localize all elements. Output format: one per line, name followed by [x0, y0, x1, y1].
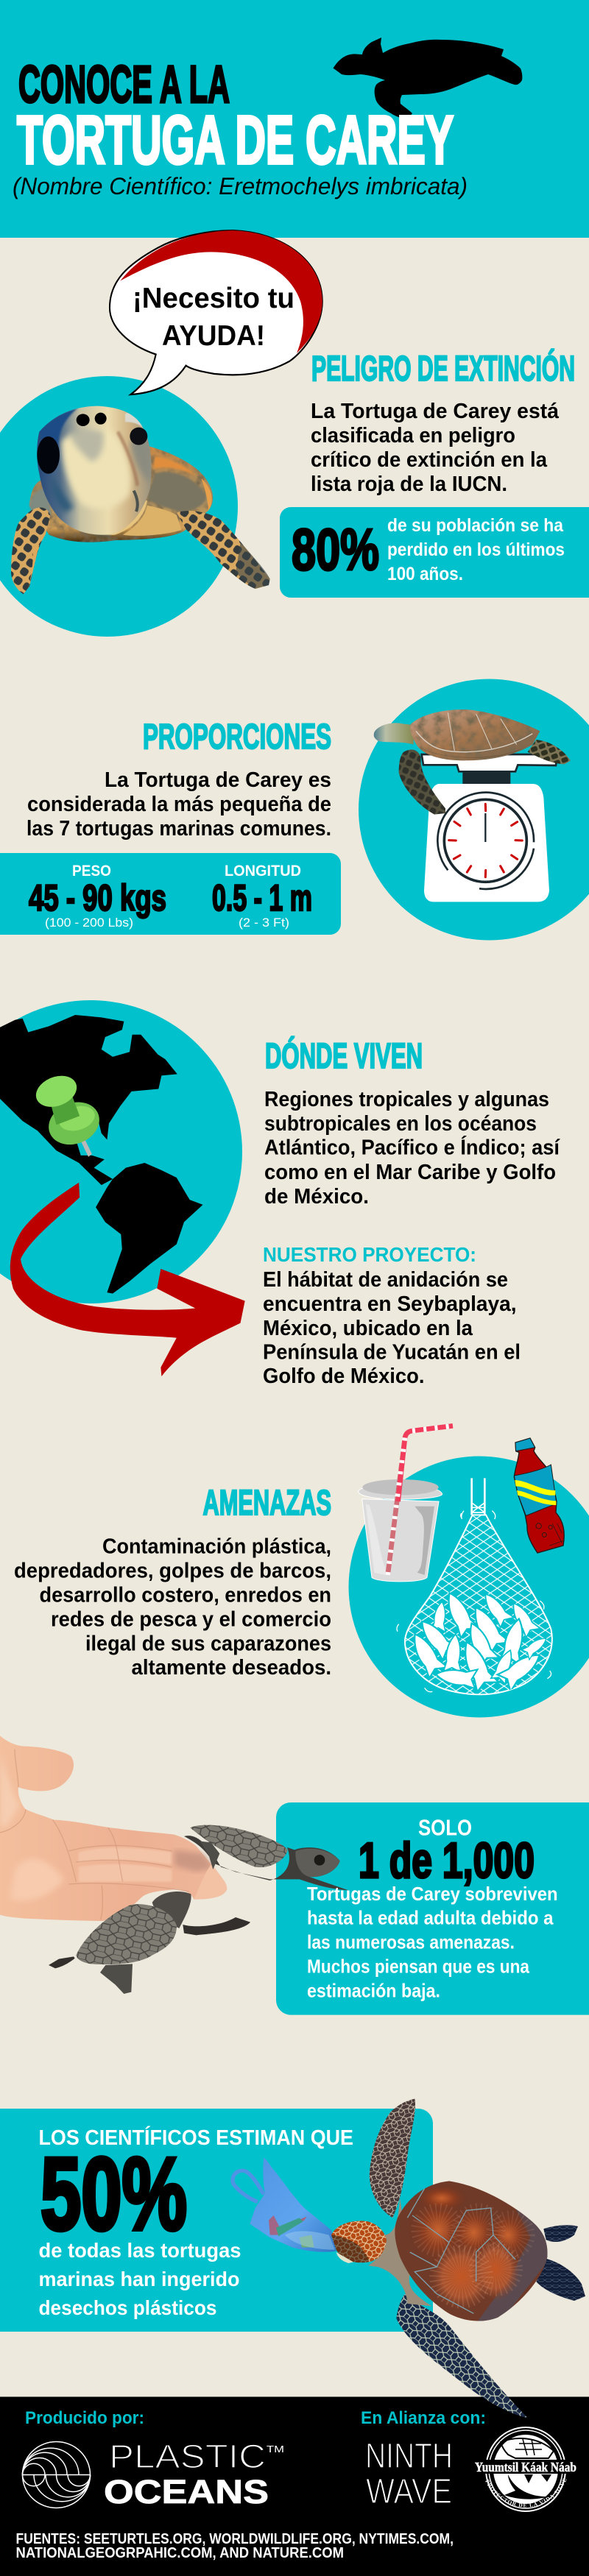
text block: amenazas: desarrollo costero, enredos en	[40, 1584, 331, 1607]
text block: proporciones: las 7 tortugas marinas comunes.	[27, 817, 331, 841]
text block: regiones: de México.	[264, 1185, 369, 1209]
icon: plastic cup with straw	[359, 1426, 453, 1582]
panel: proporciones	[0, 679, 589, 941]
header panel	[0, 0, 589, 238]
logo: ninth wave: WAVE	[366, 2472, 452, 2511]
logo: plastic oceans: OCEANS	[104, 2473, 269, 2510]
text block: proporciones	[27, 768, 331, 841]
panel: donde viven	[0, 1000, 560, 1388]
subheading: nuestro proyecto: NUESTRO PROYECTO:	[263, 1243, 476, 1266]
text block: regiones: como en el Mar Caribe y Golfo	[264, 1161, 556, 1184]
text block: ingested plastics: marinas han ingerido	[38, 2268, 240, 2290]
teal circle behind plastics	[349, 1456, 589, 1718]
text block: extinction: La Tortuga de Carey está	[311, 400, 560, 423]
text block: ingested plastics: de todas las tortugas	[38, 2239, 241, 2262]
stats bar: peso y longitud	[0, 853, 341, 935]
stat: 50 percent: 50%	[40, 2136, 187, 2251]
text block: proyecto	[263, 1268, 521, 1388]
text block: proyecto: México, ubicado en la	[263, 1317, 473, 1340]
photo: green turtle	[331, 2099, 585, 2418]
logo: plastic oceans: TM	[267, 2444, 284, 2455]
text block: sources	[16, 2530, 454, 2561]
text block: survival: estimación baja.	[307, 1980, 440, 2002]
text block: amenazas: depredadores, golpes de barcos,	[14, 1559, 331, 1582]
text block: amenazas: ilegal de sus caparazones	[85, 1632, 331, 1656]
text block: extinction	[311, 400, 560, 496]
callout: 80 percent	[280, 507, 589, 598]
text block: proyecto: El hábitat de anidación se	[263, 1268, 508, 1292]
stats bar: peso y longitud: PESO	[72, 863, 111, 880]
stats bar: peso y longitud: (100 - 200 Lbs)	[45, 916, 133, 930]
stats bar: peso y longitud: (2 - 3 Ft)	[239, 916, 289, 930]
stats bar: peso y longitud: 45 - 90 kgs	[29, 877, 166, 919]
text block: regiones: Atlántico, Pacífico e Índico; así	[264, 1135, 560, 1160]
logo: ninth wave	[365, 2437, 453, 2511]
teal circle behind turtle	[0, 376, 238, 637]
speech bubble	[110, 230, 322, 394]
text block: proyecto: Península de Yucatán en el	[263, 1341, 521, 1365]
icon: plastic bag	[233, 2158, 336, 2252]
teal card	[276, 1802, 589, 2015]
heading: scientists estimate: LOS CIENTÍFICOS ESTIMAN QUE	[38, 2125, 353, 2150]
text block: regiones	[264, 1088, 560, 1209]
text block: proyecto: encuentra en Seybaplaya,	[263, 1292, 517, 1316]
panel: 50 percent plastic	[0, 2099, 585, 2418]
text block: proyecto: Golfo de México.	[263, 1365, 424, 1388]
text block: extinction: crítico de extinción en la	[311, 448, 548, 472]
callout: 80 percent: perdido en los últimos	[387, 539, 565, 560]
title: conoce a la: CONOCE A LA	[18, 56, 230, 114]
logo: plastic oceans	[22, 2438, 284, 2510]
stats bar: peso y longitud: 0.5 - 1 m	[212, 877, 312, 919]
callout: 80 percent: 100 años.	[387, 564, 463, 584]
teal card	[0, 2109, 433, 2332]
logo: ninth wave: NINTH	[365, 2437, 453, 2476]
stats bar: peso y longitud: LONGITUD	[225, 863, 301, 880]
panel: solo 1 de 1000	[0, 1735, 589, 2015]
text block: proporciones: considerada la más pequeña de	[27, 793, 331, 816]
text block: regiones: subtropicales en los océanos	[264, 1112, 537, 1136]
teal circle behind scale	[359, 679, 589, 941]
text block: survival	[307, 1883, 558, 2002]
text block: sources: NATIONALGEOGRPAHIC.COM, AND NATURE.COM	[16, 2544, 344, 2561]
heading: proporciones: PROPORCIONES	[143, 718, 331, 757]
text block: ingested plastics	[38, 2239, 241, 2319]
icon: sea turtle silhouette	[333, 38, 522, 119]
logo: plastic oceans: PLASTIC	[109, 2438, 266, 2475]
text block: amenazas	[14, 1535, 331, 1680]
text block: extinction: lista roja de la IUCN.	[311, 473, 507, 496]
panel: amenazas	[14, 1426, 589, 1718]
text block: amenazas: altamente deseados.	[131, 1656, 331, 1680]
text block: survival: Tortugas de Carey sobreviven	[307, 1883, 558, 1905]
text block: amenazas: redes de pesca y el comercio	[51, 1608, 331, 1632]
callout: 80 percent: 80%	[292, 517, 379, 582]
callout: 80 percent: de su población se ha	[387, 515, 564, 536]
logo: yuumtsil kaak naab: PROTECTOR DE LA VIDA SILVESTRE	[485, 2478, 567, 2507]
text block: survival: Muchos piensan que es una	[307, 1956, 529, 1978]
icon: fishing net with fish	[397, 1478, 552, 1694]
subtitle: scientific name: (Nombre Científico: Eretmochelys imbricata)	[13, 173, 468, 199]
text block: sources: FUENTES: SEETURTLES.ORG, WORLDWILDLIFE.ORG, NYTIMES.COM,	[16, 2530, 454, 2547]
photo: hawksbill turtle front view	[11, 406, 270, 594]
icon: soda bottle	[514, 1438, 564, 1553]
text block: extinction: clasificada en peligro	[311, 424, 515, 447]
icon: green push pin	[34, 1072, 102, 1156]
panel: peligro de extincion	[0, 230, 589, 637]
label: solo: SOLO	[418, 1815, 472, 1841]
heading: donde viven: DÓNDE VIVEN	[265, 1036, 423, 1076]
icon: weighing scale with turtle	[374, 710, 571, 902]
arrow: red curved	[10, 1183, 245, 1376]
text block: survival: las numerosas amenazas.	[307, 1931, 515, 1953]
speech bubble: AYUDA!	[162, 320, 265, 352]
text block: amenazas: Contaminación plástica,	[102, 1535, 331, 1559]
label: producido por: Producido por:	[25, 2408, 144, 2428]
map: americas	[0, 1015, 203, 1293]
heading: amenazas: AMENAZAS	[203, 1484, 331, 1523]
baby turtle on fingers	[184, 1825, 348, 1890]
label: en alianza con: En Alianza con:	[361, 2408, 486, 2428]
baby turtle on beach	[49, 1892, 250, 1994]
globe	[0, 1000, 242, 1303]
speech bubble: ¡Necesito tu	[133, 283, 294, 314]
text block: survival: hasta la edad adulta debido a	[307, 1906, 554, 1928]
text block: proporciones: La Tortuga de Carey es	[105, 768, 331, 792]
photo: hand with baby turtles	[0, 1735, 227, 1921]
footer background	[0, 2396, 589, 2576]
text block: ingested plastics: desechos plásticos	[38, 2296, 216, 2319]
text block: regiones: Regiones tropicales y algunas	[264, 1088, 549, 1111]
